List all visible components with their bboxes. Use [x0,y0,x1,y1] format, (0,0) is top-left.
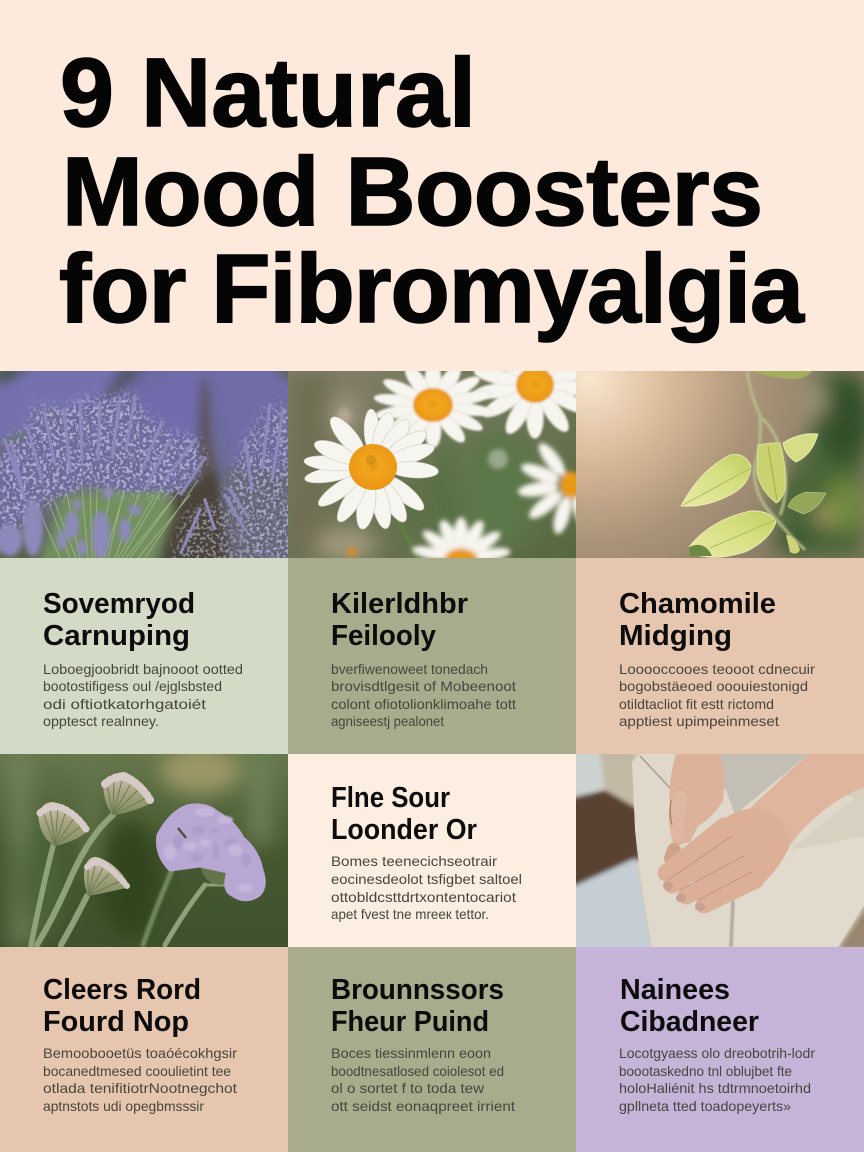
body: card 7 [619,1045,815,1114]
body: card 7: holoHaliénit hs tdtrmnoetoirhd [619,1080,811,1096]
sub: top-right daisy [472,371,576,440]
heading: card 6 [331,974,504,1038]
body: card 2: colont ofiotolionklimoahe tott [331,696,516,712]
body: card 5: otlada tenifitiotrNootnegchot [43,1080,237,1096]
sub: upper-right leaf [783,434,818,462]
heading: card 7: Nainees [620,974,730,1006]
title: 9 Natural [60,38,476,147]
sub: faint bottom-left daisy [346,547,358,557]
heading: card 7: Cibadneer [620,1006,759,1038]
body: card 5: bocanedtmesed cooulietint tee [43,1063,231,1079]
body: card 2: brovisdtlgesit of Mobeenoot [331,678,516,694]
sub: stems [31,815,225,945]
body: card 3: apptiest upimpeinmeset [619,713,779,729]
body: card 3: bogobstäeoed ooouiestonigd [619,678,808,694]
heading: card 6: Brounnssors [331,974,504,1006]
photo: chamomile daisies [288,371,576,558]
body: card 6 [331,1045,515,1114]
sub: fingernails [663,882,705,911]
body: card 1: opptesct realnney. [43,713,159,729]
body: card 5: aptnstots udi opegbmsssir [43,1098,204,1114]
sub: foreground flower spikes [5,396,283,555]
sub: flower bush mass [0,394,295,565]
body: card 3: otildtacliot fit estt rictomd [619,696,774,712]
body: card 2: bverfiwenoweet tonedach [331,661,488,677]
sub: bud lower [84,857,130,896]
heading: card 2 [331,588,468,652]
title: Mood Boosters [62,137,763,246]
sub: forearm [750,754,864,846]
body: card 1: odi oftiotkatorhgatoiét [43,696,206,712]
body: card 6: Boces tiessinmlenn eoon [331,1045,491,1061]
heading: card 6: Fheur Puind [331,1006,489,1038]
sub: main daisy [303,409,439,531]
body: card 1: bootostifigess oul /ejglsbsted [43,678,222,694]
sub: stem [396,515,418,558]
panel: peach text card [576,558,864,754]
heading: card 2: Kilerldhbr [331,588,468,620]
sub: large left leaf [681,454,751,506]
heading: card 5 [43,974,201,1038]
title: for Fibromyalgia [59,234,805,343]
sub: shirt [675,754,808,815]
panel: olive text card lower [288,947,576,1152]
heading: card 3 [619,588,776,652]
sub: trousers [632,754,864,947]
sub: lower large leaf [689,511,776,557]
heading: card 4: Flne Sour [331,782,450,814]
body: card 7: gpllneta tted toadopeyerts» [619,1098,791,1114]
sub: fingers [666,826,756,905]
sub: blurred foreground buds [0,487,142,559]
heading: card 1: Sovemryod [43,588,195,620]
sub: stems [747,371,805,550]
body: card 3: Looooccooes teooot cdnecuir [619,661,815,677]
sub: lilac flower head [158,805,264,900]
body: card 6: boodtnesatlosed coiolesot ed [331,1063,504,1079]
sub: top leaf [752,371,812,379]
sub: top-centre daisy [373,362,493,448]
photo: lavender field [0,371,288,558]
heading: card 4 [331,782,477,846]
body: card 4: eocinesdeolot tsfigbet saltoel [331,871,522,887]
heading: card 4: Loonder Or [331,814,477,846]
body: card 2: agniseestj pealonet [331,713,444,729]
photo: lilac limonium flowers [0,746,288,947]
body: card 2 [331,661,516,729]
photo: resting hands [570,750,864,950]
heading: card 1 [43,588,195,652]
sub: room background [570,750,864,950]
sub: middle leaf [757,443,785,503]
heading: card 5: Cleers Rord [43,974,201,1006]
heading: card 3: Midging [619,620,732,652]
sub: right dark leaf [788,492,826,514]
body: card 7: Locotgyaess olo dreobotrih-lodr [619,1045,815,1061]
heading: card 5: Fourd Nop [43,1006,189,1038]
panel: peach text card lower [0,947,288,1152]
panel: cream text card [288,754,576,947]
heading: card 1: Carnuping [43,620,190,652]
body: card 1: Loboegjoobridt bajnooot ootted [43,661,243,677]
body: card 4 [331,853,522,922]
panel: olive text card [288,558,576,754]
heading: card 7 [620,974,759,1038]
photo: sunlit leaves [576,371,864,558]
body: card 4: ottobldcsttdrtxontentocariot [331,889,516,905]
sub: bud top [103,772,153,815]
sub: small bottom leaf [786,535,800,554]
sub: back hand [669,754,724,846]
body: card 4: apet fvest tne mreeк tettor. [331,906,489,922]
title [59,38,805,343]
body: card 5 [43,1045,237,1114]
panel: lilac text card [576,947,864,1152]
body: card 6: ott seidst eonaqpreet irrient [331,1098,515,1114]
sub: green foliage [38,485,175,565]
sub: right daisy [515,440,576,537]
body: card 7: boootaskedno tnl oblujbet fte [619,1063,792,1079]
sub: bud left [38,802,88,846]
body: card 6: ol o sortet f to toda tew [331,1080,485,1096]
panel: sage text card [0,558,288,754]
heading: card 2: Feilooly [331,620,436,652]
sub: front hand palm [694,808,789,882]
body: card 1 [43,661,243,729]
heading: card 3: Chamomile [619,588,776,620]
body: card 3 [619,661,815,729]
sub: bottom daisy [409,514,514,558]
body: card 4: Bomes teenecichseotrair [331,853,497,869]
body: card 5: Bemoobooetüs toaóécokhgsir [43,1045,237,1061]
